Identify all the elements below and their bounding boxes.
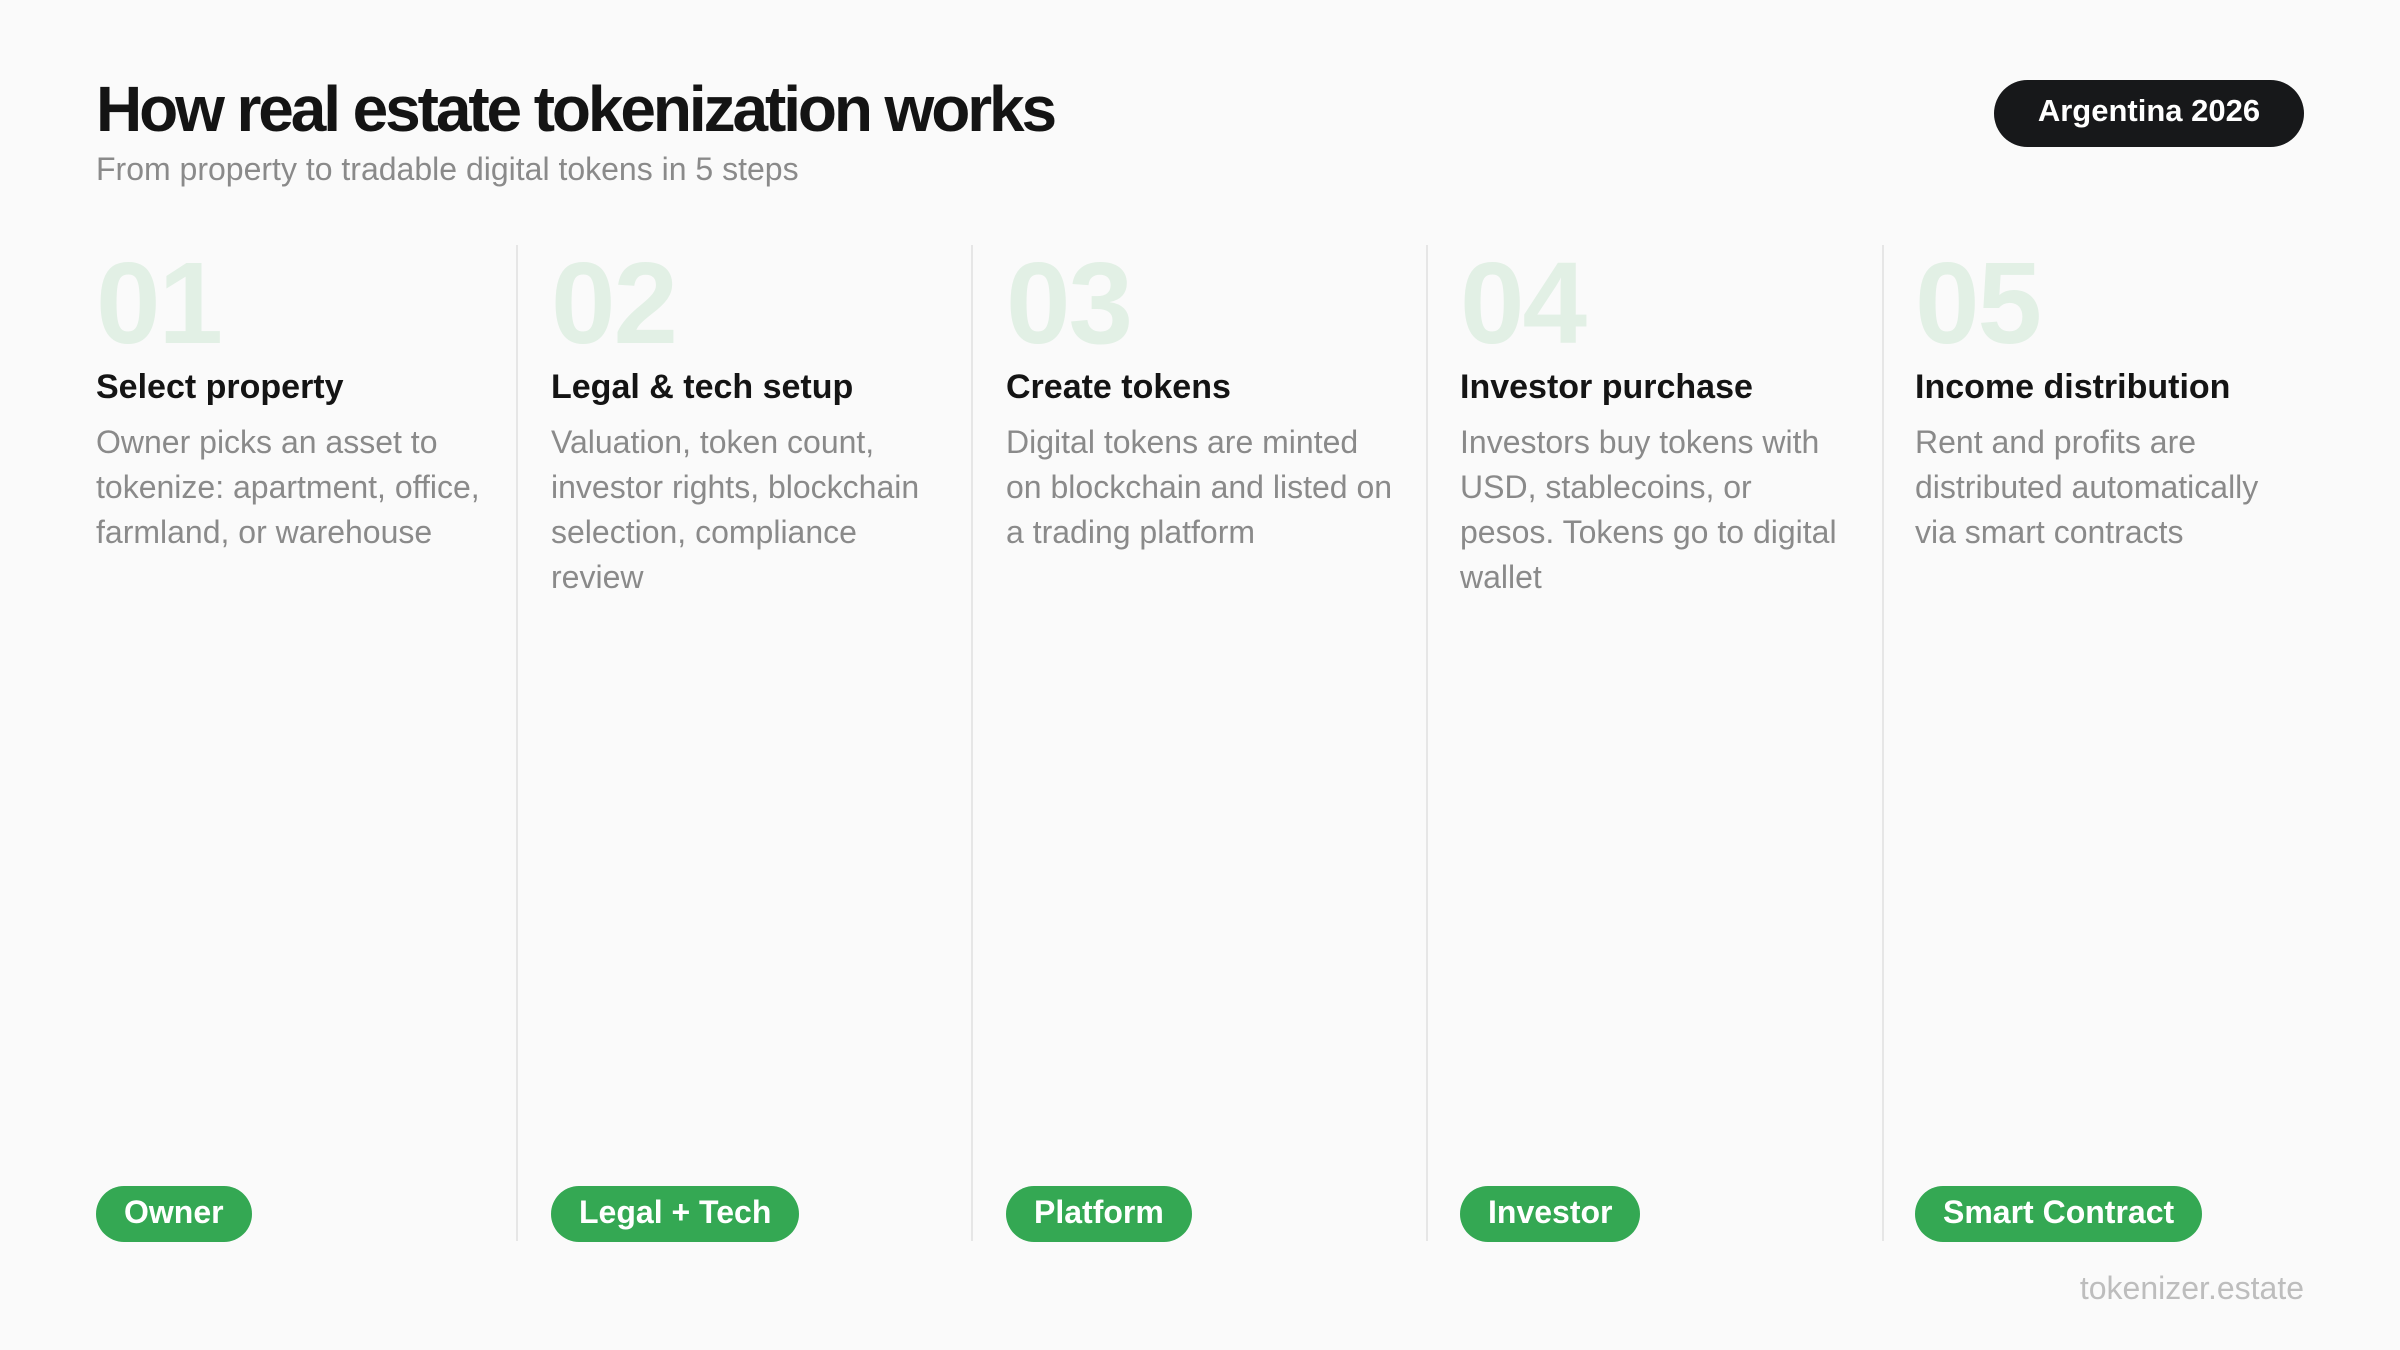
pill: Owner: Owner — [124, 1194, 224, 1230]
step number 02: 02 — [551, 238, 676, 368]
pill: Platform — [1006, 1186, 1192, 1242]
heading: investor purchase: Investor purchase — [1460, 368, 1753, 406]
subtitle: From property to tradable digital tokens in 5 steps — [96, 151, 799, 187]
description 03: Digital tokens are minted on blockchain and listed on a trading platform — [1006, 424, 1392, 550]
heading: legal & tech: Legal & tech setup — [551, 368, 853, 406]
description 04: Investors buy tokens with USD, stablecoins, or pesos. Tokens go to digital wallet — [1460, 424, 1837, 595]
panel: step 03 — [1006, 238, 1392, 1242]
title: How real estate tokenization works — [96, 73, 1054, 145]
step number 04: 04 — [1460, 238, 1585, 368]
step number 05: 05 — [1915, 238, 2040, 368]
panel: step 02 — [551, 238, 919, 1242]
pill: Legal + Tech — [551, 1186, 799, 1242]
pill: Investor — [1460, 1186, 1640, 1242]
step number 03: 03 — [1006, 238, 1131, 368]
description 02: Valuation, token count, investor rights, blockchain selection, compliance review — [551, 424, 919, 595]
pill: Smart Contract: Smart Contract — [1943, 1194, 2174, 1230]
pill: Platform: Platform — [1034, 1194, 1164, 1230]
heading: create tokens: Create tokens — [1006, 368, 1231, 406]
description 05: Rent and profits are distributed automatically via smart contracts — [1915, 424, 2258, 550]
step number 01: 01 — [96, 238, 221, 368]
badge: Argentina 2026: Argentina 2026 — [2038, 93, 2260, 128]
panel: step 01 — [96, 238, 480, 1242]
panel: step 05 — [1915, 238, 2258, 1242]
pill: Owner — [96, 1186, 252, 1242]
pill: Investor: Investor — [1488, 1194, 1612, 1230]
pill: Smart Contract — [1915, 1186, 2202, 1242]
pill: Legal + Tech: Legal + Tech — [579, 1194, 771, 1230]
heading: select property: Select property — [96, 368, 344, 406]
description 01: Owner picks an asset to tokenize: apartment, office, farmland, or warehouse — [96, 424, 480, 550]
panel: step 04 — [1460, 238, 1837, 1242]
badge: Argentina 2026 — [1994, 80, 2304, 147]
footer: tokenizer.estate — [2080, 1270, 2304, 1306]
heading: income distribution: Income distribution — [1915, 368, 2230, 406]
